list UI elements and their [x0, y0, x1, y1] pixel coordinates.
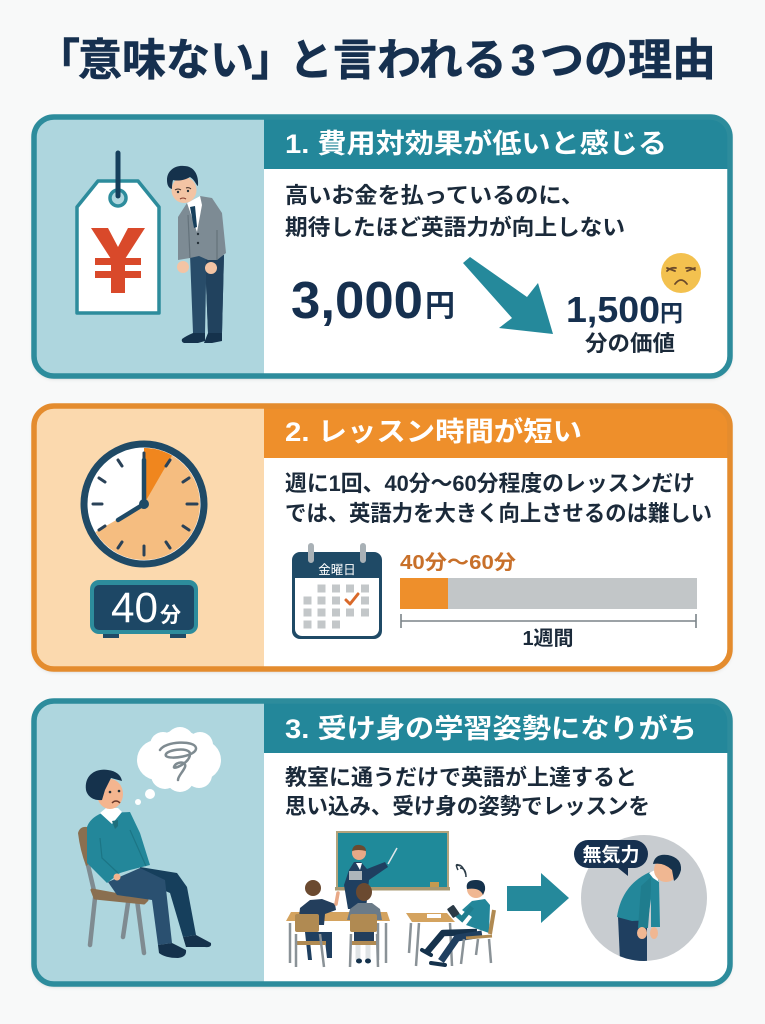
- bar chart: lesson share of a week: [400, 578, 697, 609]
- heading band: [264, 406, 730, 458]
- body text: では、英語力を大きく向上させるのは難しい: [285, 501, 712, 526]
- body text: 高いお金を払っているのに、: [285, 183, 584, 208]
- bracket label: 1週間: [522, 627, 574, 650]
- title: 」: [251, 36, 295, 85]
- left illustration background: [34, 701, 264, 984]
- body text: 教室に通うだけで英語が上達すると: [285, 765, 637, 790]
- heading: 2. レッスン時間が短い: [285, 416, 582, 447]
- card border: [34, 406, 730, 669]
- icon: digital timer 40 minutes: 分: [160, 604, 181, 627]
- left illustration background: [34, 406, 264, 669]
- body text: [285, 765, 650, 819]
- left illustration background: [34, 117, 264, 376]
- title: 3: [511, 36, 535, 85]
- arrow: leads to apathy: [507, 873, 569, 923]
- perceived value: 1,500 yen: 円: [660, 300, 683, 326]
- desk left: [286, 912, 390, 963]
- icon: clock with 40 minute sector: [84, 444, 204, 564]
- icon: unhappy face: [661, 253, 701, 293]
- speech bubble: apathy: 無気力: [582, 844, 640, 866]
- card border: [34, 701, 730, 984]
- price before: 3,000 yen: 3,000: [291, 272, 423, 330]
- heading: 1. 費用対効果が低いと感じる: [285, 128, 667, 159]
- value caption: 分の価値: [585, 331, 675, 356]
- blackboard: [335, 832, 450, 890]
- desk right: [406, 913, 455, 966]
- icon: calendar Friday: 金曜日: [318, 563, 356, 577]
- card background: [34, 701, 730, 984]
- body text: [285, 183, 625, 240]
- heading band: [264, 701, 730, 753]
- student left: [295, 880, 338, 967]
- icon: price tag with yen: [77, 153, 159, 313]
- icon: calendar Friday: [292, 546, 382, 639]
- card background: [34, 117, 730, 376]
- title: つの理由: [540, 36, 716, 85]
- title: 「: [36, 36, 80, 85]
- title: 意味ない: [78, 36, 254, 85]
- student center: [347, 883, 382, 967]
- bar label: lesson time: 40分〜60分: [400, 551, 516, 574]
- body text: 週に1回、40分〜60分程度のレッスンだけ: [285, 471, 695, 496]
- perceived value: 1,500 yen: 1,500: [566, 289, 660, 330]
- icon: digital timer 40 minutes: 40: [111, 584, 158, 632]
- body text: 思い込み、受け身の姿勢でレッスンを: [285, 794, 650, 819]
- illustration: apathetic bowing student: [581, 835, 707, 961]
- bracket: one week span: [401, 614, 696, 628]
- heading band: [264, 117, 730, 169]
- icon: slumped student on chair: [78, 770, 211, 958]
- panel: reason 3 passive learning: [34, 701, 730, 984]
- yen unit: 円: [425, 290, 455, 323]
- card background: [34, 406, 730, 669]
- body text: [285, 471, 712, 526]
- icon: disappointed man in suit: [167, 166, 226, 343]
- heading: 3. 受け身の学習姿勢になりがち: [285, 713, 697, 744]
- panel: reason 1 cost performance: [34, 117, 730, 376]
- title: と言われる: [289, 36, 507, 85]
- icon: digital timer 40 minutes: [90, 580, 198, 638]
- teacher: [344, 845, 397, 909]
- student using smartphone: [422, 865, 494, 965]
- arrow: value falling: [463, 257, 553, 334]
- card border: [34, 117, 730, 376]
- panel: reason 2 short lesson time: [34, 406, 730, 669]
- icon: thought bubble with swirl: [135, 727, 221, 805]
- illustration: classroom with bored student: [286, 832, 494, 967]
- speech bubble: apathy: [574, 840, 648, 876]
- body text: 期待したほど英語力が向上しない: [285, 215, 625, 240]
